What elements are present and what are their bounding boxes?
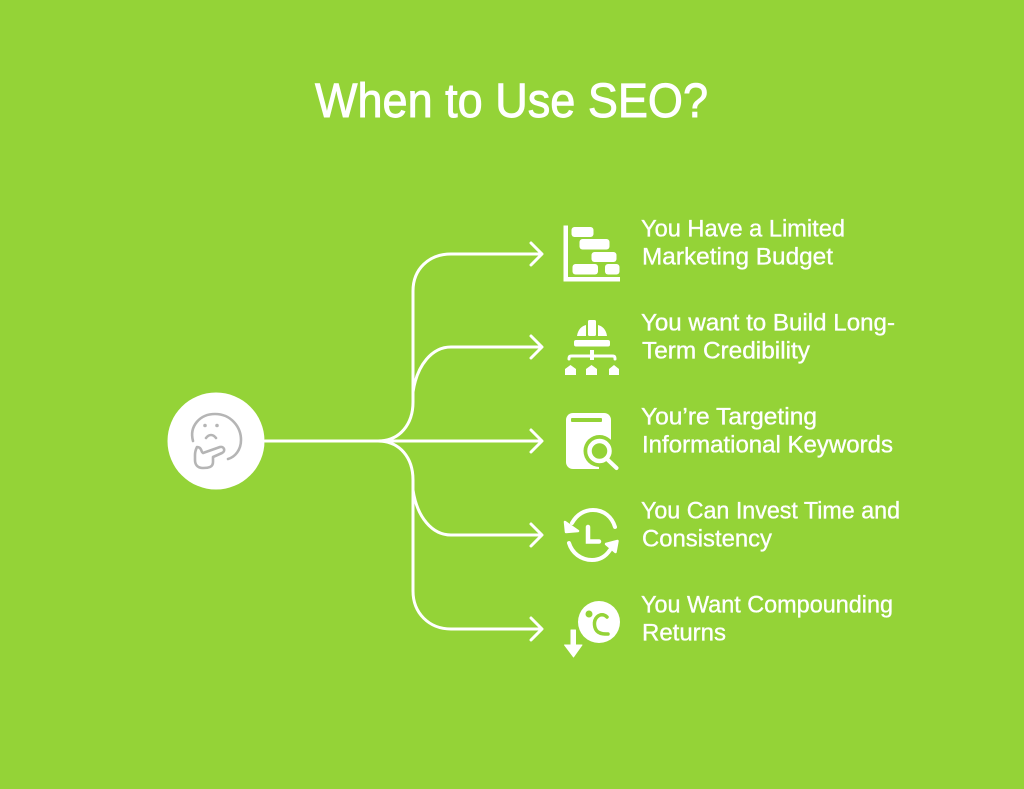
label: time and consistency: Consistency xyxy=(642,526,772,552)
label: informational keywords: Informational Keywords xyxy=(642,432,893,458)
connector arrows xyxy=(265,243,542,640)
icon: compounding returns xyxy=(564,601,620,657)
label: informational keywords: You’re Targeting xyxy=(641,404,817,430)
label: informational keywords xyxy=(641,404,893,458)
label: long-term credibility: Term Credibility xyxy=(642,338,810,364)
label: time and consistency xyxy=(641,498,900,552)
icon: book with magnifier xyxy=(566,413,616,471)
label: limited budget xyxy=(641,216,845,270)
label: long-term credibility xyxy=(641,310,895,364)
label: time and consistency: You Can Invest Time and xyxy=(641,498,900,524)
icon: hard hat hierarchy xyxy=(565,320,619,375)
label: limited budget: You Have a Limited xyxy=(641,216,845,242)
icon: gantt chart xyxy=(564,226,620,282)
label: long-term credibility: You want to Build Long- xyxy=(641,310,895,336)
label: compounding returns: You Want Compounding xyxy=(641,592,893,618)
label: limited budget: Marketing Budget xyxy=(642,244,833,270)
label: compounding returns: Returns xyxy=(642,620,726,646)
title: When to Use SEO? xyxy=(315,74,708,128)
central thinking face icon xyxy=(168,392,264,490)
icon: clock with cycle arrows xyxy=(565,510,618,560)
label: compounding returns xyxy=(641,592,893,646)
